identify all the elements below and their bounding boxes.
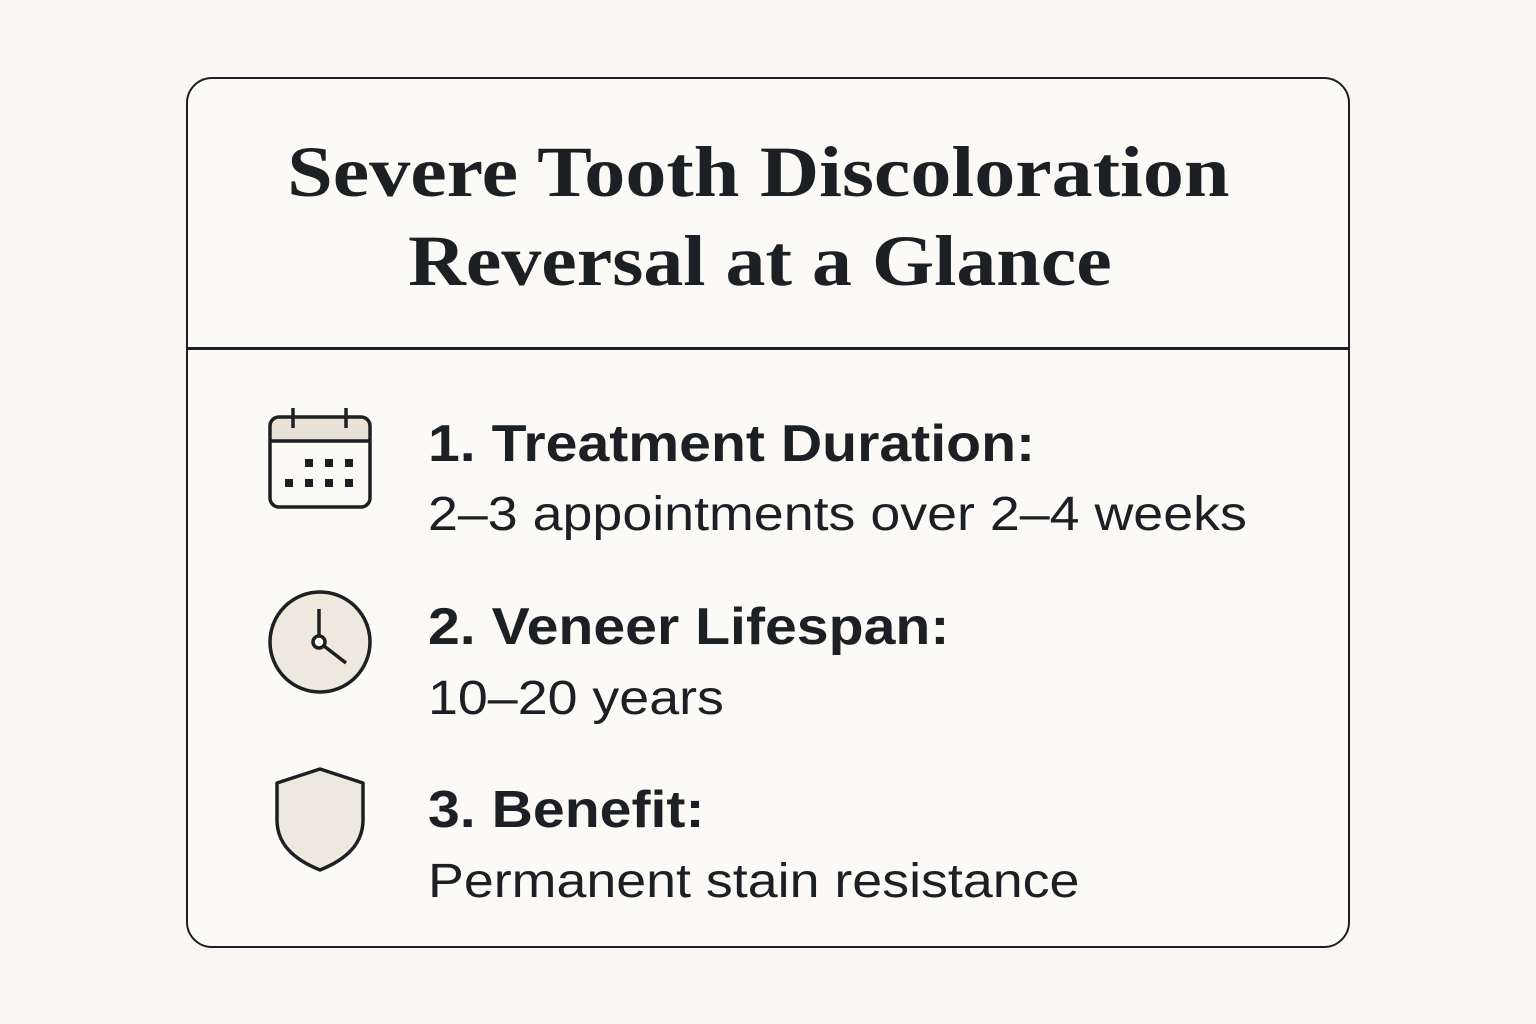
item 3 text: Permanent stain resistance [428,855,1079,908]
card panel [186,77,1350,948]
title: Reversal at a Glance [408,221,1112,301]
title [287,132,1229,301]
title: Severe Tooth Discoloration [287,132,1229,212]
icon: clock [270,592,370,692]
item 1 text: 2–3 appointments over 2–4 weeks [428,488,1247,541]
item 3 heading: 3. Benefit: [428,781,705,839]
item 1 heading: 1. Treatment Duration: [428,415,1035,473]
item 2 heading: 2. Veneer Lifespan: [428,598,949,656]
icon: calendar [270,408,370,507]
item 2 text: 10–20 years [428,672,724,725]
icon: shield [277,769,363,870]
